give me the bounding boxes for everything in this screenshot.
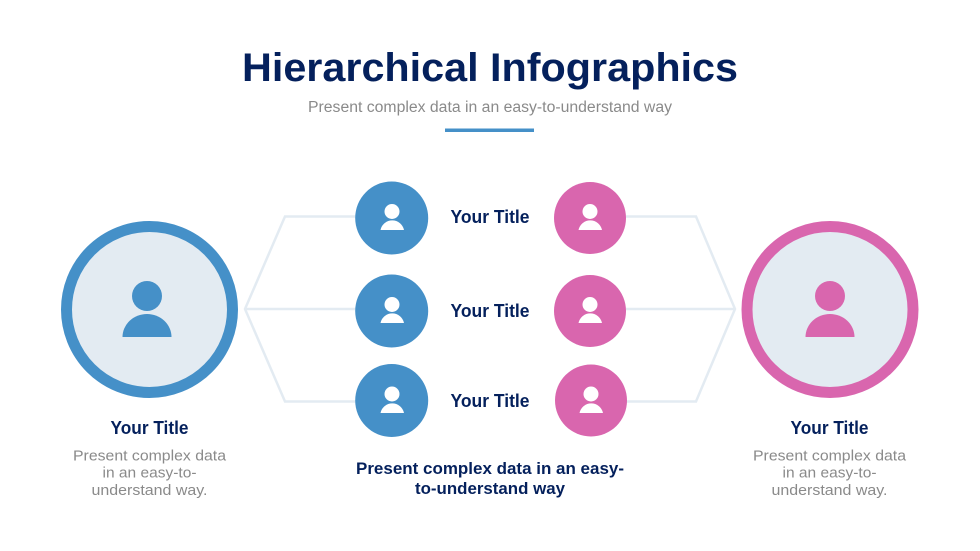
right description: in an easy-to- bbox=[782, 464, 876, 482]
connector lines: right bbox=[626, 216, 735, 402]
panel: right main circle bbox=[747, 226, 913, 392]
connector lines: left bbox=[245, 216, 356, 402]
label: center bottom: Your Title bbox=[450, 391, 530, 411]
title: Hierarchical Infographics bbox=[242, 46, 738, 90]
subtitle: Present complex data in an easy-to-understand way bbox=[308, 99, 672, 116]
icon: person bbox=[122, 281, 172, 337]
node: blue top bbox=[355, 182, 428, 254]
node: pink bottom bbox=[555, 364, 627, 436]
node: blue middle bbox=[355, 274, 428, 348]
ring bbox=[747, 226, 913, 392]
center description: Present complex data in an easy- bbox=[356, 460, 624, 478]
right description: understand way. bbox=[772, 482, 888, 499]
left description: Present complex data bbox=[73, 448, 227, 464]
label: center top: Your Title bbox=[450, 207, 530, 227]
node: pink top bbox=[554, 182, 626, 254]
right title: Your Title bbox=[790, 418, 868, 438]
icon: person bbox=[806, 281, 854, 337]
title underline bbox=[445, 128, 534, 132]
node: blue bottom bbox=[355, 364, 428, 437]
node: pink middle bbox=[554, 275, 626, 347]
center description bbox=[356, 460, 624, 498]
left description: in an easy-to- bbox=[102, 464, 196, 482]
right description: Present complex data bbox=[753, 448, 907, 464]
left description: understand way. bbox=[92, 482, 208, 499]
ring bbox=[66, 226, 232, 392]
panel: left main circle bbox=[66, 226, 232, 392]
label: center middle: Your Title bbox=[450, 301, 530, 321]
center description: to-understand way bbox=[415, 480, 566, 498]
right description bbox=[753, 448, 907, 499]
left title: Your Title bbox=[110, 418, 188, 438]
left description bbox=[73, 448, 227, 499]
